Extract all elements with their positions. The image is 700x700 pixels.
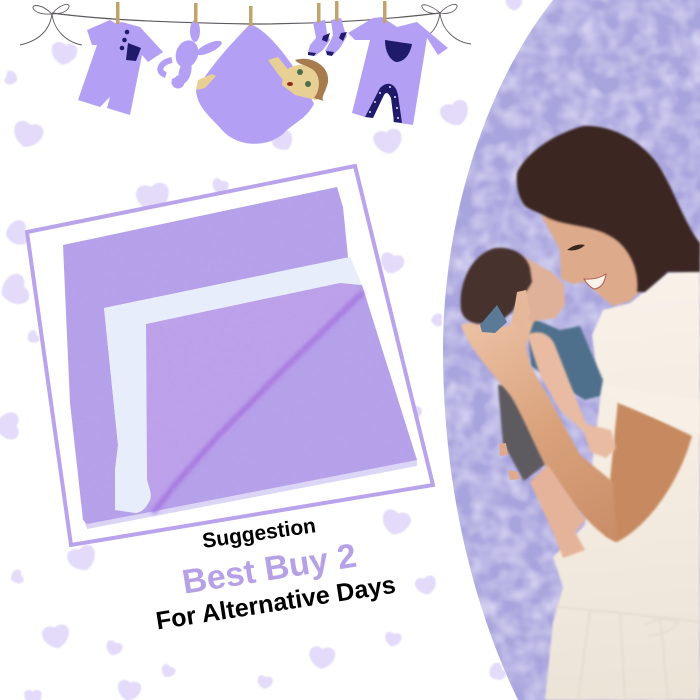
fold shadow (153, 292, 363, 513)
white corner repaint (104, 257, 362, 513)
scattered hearts (0, 0, 521, 700)
caption: best buy 2: Best Buy 2 (180, 537, 359, 602)
baby's grey knit leggings (498, 385, 547, 481)
baby's face (522, 256, 566, 323)
baby's lower leg and foot (530, 465, 585, 558)
mother's dress (545, 270, 700, 700)
mother's neck and face (540, 214, 641, 307)
front folded fleece (146, 283, 363, 513)
baby's toes (499, 443, 520, 480)
back fleece layer (63, 187, 417, 524)
mother's upper arm (605, 400, 692, 542)
baby's arm and fist (527, 332, 616, 458)
trim dots (369, 86, 399, 119)
mother's eye and smile (567, 245, 606, 289)
baby head (282, 65, 325, 100)
romper pocket (385, 40, 412, 62)
baby's hair bow strap (480, 305, 507, 333)
pale bottom edge (84, 458, 417, 529)
peg (116, 2, 120, 24)
buttons and pocket (126, 43, 141, 61)
caption: suggestion: Suggestion (201, 514, 317, 553)
baby raised hand (268, 57, 290, 82)
fleece texture (84, 522, 85, 523)
white underside (104, 257, 362, 513)
baby's denim overalls (527, 316, 603, 400)
fingers on baby's head (512, 290, 526, 322)
clothes: bunny toy (160, 3, 224, 88)
peg (249, 6, 252, 26)
clothes: romper (348, 1, 448, 125)
mother's forearm and hand (461, 292, 617, 542)
rope (52, 13, 440, 24)
clothesline (20, 4, 471, 45)
product frame (27, 166, 433, 545)
product: folded waterproof pad (60, 186, 420, 531)
baby hair (295, 59, 328, 101)
panel: mother and baby photo on lilac oval (440, 0, 700, 700)
left bow (20, 4, 82, 45)
dress folds (556, 606, 679, 635)
clothes: baby in hanging wrap (196, 6, 328, 144)
clothes: socks (308, 1, 347, 56)
caption: for alternative days: For Alternative Days (154, 571, 398, 635)
lilac textured oval (440, 0, 700, 700)
baby eyes and mouth (297, 69, 303, 75)
baby hand left (196, 74, 216, 90)
mother's hair (517, 126, 700, 292)
clothes: t-shirt (78, 2, 163, 115)
baby's hair (461, 248, 532, 324)
sleeve (616, 399, 700, 434)
romper navy leg trim (365, 84, 402, 123)
right bow (421, 4, 471, 44)
